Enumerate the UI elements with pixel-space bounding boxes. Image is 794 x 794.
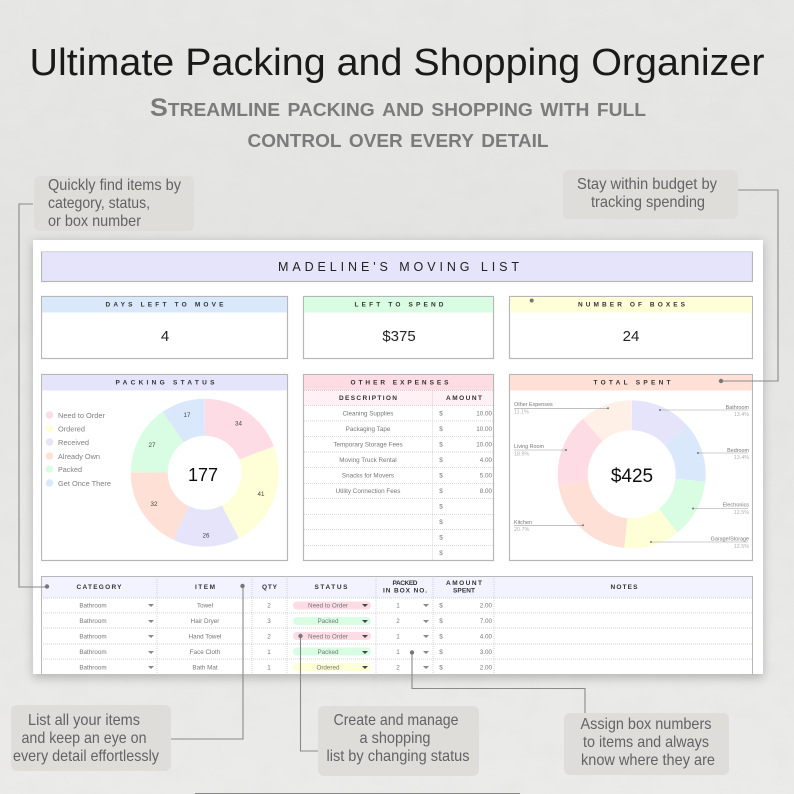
expenses table header: AMOUNT bbox=[446, 395, 482, 402]
stat card: number of boxes bbox=[510, 296, 752, 358]
expenses table rows: 10.00 bbox=[476, 410, 492, 418]
table rows: Hair Dryer bbox=[191, 618, 219, 625]
marker dot on number of boxes bbox=[530, 298, 534, 302]
expenses table rows: Snacks for Movers bbox=[342, 472, 394, 480]
items table header: IN BOX NO. bbox=[383, 588, 427, 594]
arrow: budget callout to total spent bbox=[719, 190, 778, 383]
donut chart: packing status: 17 bbox=[184, 412, 191, 419]
legend: Packed bbox=[58, 465, 82, 474]
table rows: Hand Towel bbox=[189, 634, 221, 640]
panel: other expenses bbox=[304, 374, 494, 560]
expenses table rows: 8.00 bbox=[480, 488, 492, 495]
items table header: STATUS bbox=[314, 584, 348, 591]
expenses table rows: 5.00 bbox=[480, 472, 492, 480]
chart labels: Bathroom bbox=[726, 405, 750, 411]
table rows: 1 bbox=[267, 649, 271, 656]
callout: list all your items: List all your items bbox=[28, 712, 140, 729]
table rows: Need to Order bbox=[308, 602, 348, 610]
items table header: ITEM bbox=[195, 584, 215, 591]
callout: quickly find items: Quickly find items by bbox=[48, 177, 181, 194]
chart labels: Bedroom bbox=[727, 448, 750, 454]
chart labels bbox=[514, 402, 750, 550]
expenses table rows: 10.00 bbox=[476, 442, 492, 448]
chart labels: Garage/Storage bbox=[711, 536, 749, 542]
panel: other expenses: OTHER EXPENSES bbox=[350, 380, 449, 386]
chart labels: 13.4% bbox=[734, 455, 749, 461]
dropdown arrows bbox=[148, 604, 429, 669]
table rows: 2 bbox=[396, 618, 400, 625]
callout: stay within budget bbox=[563, 170, 738, 219]
donut chart: packing status: 27 bbox=[149, 442, 156, 449]
callout: assign box numbers: Assign box numbers bbox=[580, 716, 712, 733]
table rows bbox=[79, 602, 492, 672]
callout: create and manage: list by changing status bbox=[326, 748, 470, 765]
legend: Received bbox=[58, 438, 89, 447]
arrow: items callout to item column bbox=[171, 584, 245, 739]
table rows: 1 bbox=[396, 634, 400, 640]
subtitle: control over every detail bbox=[248, 125, 548, 153]
table rows: 3 bbox=[267, 618, 271, 625]
table rows: Bathroom bbox=[79, 634, 107, 640]
table rows: Face Cloth bbox=[190, 649, 221, 656]
table rows: 3.00 bbox=[480, 649, 492, 656]
expenses table rows: $ bbox=[439, 534, 443, 542]
donut chart: packing status: 41 bbox=[258, 491, 265, 498]
expenses table rows: 10.00 bbox=[476, 426, 492, 433]
table rows: 1 bbox=[396, 649, 400, 656]
items table header: PACKED bbox=[392, 580, 418, 587]
callout: assign box numbers bbox=[564, 713, 729, 775]
items table header: CATEGORY bbox=[76, 584, 122, 591]
expenses table rows bbox=[304, 390, 493, 560]
expenses table rows: $ bbox=[439, 504, 443, 510]
chart labels: 13.4% bbox=[734, 412, 749, 418]
table rows: $ bbox=[439, 664, 443, 672]
table rows: Bathroom bbox=[79, 649, 107, 656]
donut chart: total spent bbox=[573, 415, 691, 533]
dashboard heading: Madeline's Moving List: MADELINE'S MOVING LIST bbox=[278, 260, 519, 274]
table rows: 2.00 bbox=[480, 602, 492, 610]
items table header bbox=[41, 576, 753, 598]
table rows: 2 bbox=[267, 634, 271, 640]
expenses table rows: $ bbox=[439, 519, 443, 526]
callout: quickly find items bbox=[34, 176, 194, 231]
table rows: 2 bbox=[267, 602, 271, 610]
table rows: Need to Order bbox=[308, 634, 348, 640]
legend: Need to Order bbox=[58, 411, 105, 420]
items table header: QTY bbox=[262, 584, 278, 591]
chart labels: 20.7% bbox=[514, 527, 529, 533]
title: Ultimate Packing and Shopping Organizer bbox=[30, 42, 765, 84]
table grid lines bbox=[41, 576, 753, 674]
panel: packing status: PACKING STATUS bbox=[116, 380, 215, 386]
stat card: days left to move: 4 bbox=[161, 328, 169, 345]
legend: Ordered bbox=[58, 424, 85, 434]
table rows: Bathroom bbox=[79, 618, 107, 625]
expenses table rows: Utility Connection Fees bbox=[336, 488, 400, 495]
table rows: 4.00 bbox=[480, 634, 492, 640]
expenses table rows: $ bbox=[439, 442, 443, 448]
table rows: $ bbox=[439, 602, 443, 610]
table rows: 2 bbox=[396, 664, 400, 672]
bottom edge line bbox=[195, 793, 520, 794]
callout: create and manage: a shopping bbox=[360, 730, 430, 747]
table rows: Packed bbox=[317, 618, 339, 625]
table rows: Bath Mat bbox=[192, 664, 218, 672]
items table header: AMOUNT bbox=[446, 580, 482, 587]
dashboard card bbox=[33, 240, 763, 678]
arrow: box number callout to box column bbox=[410, 650, 585, 713]
callout: assign box numbers: to items and always bbox=[583, 734, 709, 751]
arrow: search callout to category bbox=[19, 204, 49, 589]
table rows: 1 bbox=[396, 602, 400, 610]
arrow: status callout to status column bbox=[298, 634, 318, 751]
table outer border bbox=[41, 576, 753, 674]
items table bbox=[41, 576, 753, 674]
chart labels: Other Expenses bbox=[514, 402, 553, 408]
table rows: Ordered bbox=[316, 664, 340, 672]
table rows: $ bbox=[439, 618, 443, 625]
callout: create and manage bbox=[318, 706, 479, 776]
chart labels: Living Room bbox=[514, 444, 544, 450]
donut chart: packing status: 32 bbox=[151, 501, 158, 508]
table rows: Bathroom bbox=[79, 664, 107, 672]
expenses table rows: $ bbox=[439, 472, 443, 480]
subtitle bbox=[150, 94, 646, 153]
expenses table rows: $ bbox=[439, 488, 443, 495]
table rows: Towel bbox=[197, 602, 213, 610]
legend: Get Once There bbox=[58, 479, 111, 488]
table rows: $ bbox=[439, 634, 443, 640]
callout: list all your items: every detail effortlessly bbox=[13, 748, 159, 765]
chart labels: 12.5% bbox=[734, 510, 749, 516]
table rows: 1 bbox=[267, 664, 271, 672]
expenses table rows: $ bbox=[439, 457, 443, 464]
chart labels: Kitchen bbox=[514, 520, 532, 526]
expenses table rows: Cleaning Supplies bbox=[343, 410, 393, 418]
callout: list all your items bbox=[11, 705, 171, 771]
donut chart: packing status: 177 bbox=[188, 465, 218, 485]
legend bbox=[46, 411, 111, 488]
callout: stay within budget: tracking spending bbox=[591, 194, 705, 211]
chart labels: 12.5% bbox=[734, 544, 749, 550]
items table header: NOTES bbox=[610, 584, 638, 591]
panel: packing status bbox=[42, 374, 288, 560]
table rows: Packed bbox=[317, 649, 339, 656]
donut chart: packing status: 26 bbox=[203, 532, 210, 540]
table rows: 7.00 bbox=[480, 618, 492, 625]
donut chart: packing status bbox=[149, 412, 265, 540]
callout: quickly find items: or box number bbox=[48, 213, 142, 230]
panel: total spent: TOTAL SPENT bbox=[594, 380, 671, 386]
expenses table rows: $ bbox=[439, 410, 443, 418]
table rows: $ bbox=[439, 649, 443, 656]
callout: create and manage: Create and manage bbox=[334, 712, 459, 729]
expenses table rows: $ bbox=[439, 426, 443, 433]
expenses table rows: Temporary Storage Fees bbox=[333, 442, 403, 448]
table rows: 2.00 bbox=[480, 664, 492, 672]
stat card: left to spend: $375 bbox=[382, 328, 416, 345]
donut chart: total spent: $425 bbox=[611, 466, 653, 487]
donut chart: packing status: 34 bbox=[235, 420, 242, 428]
items table header: SPENT bbox=[453, 588, 475, 594]
stat card: days left to move bbox=[42, 296, 288, 358]
expenses table rows: Moving Truck Rental bbox=[339, 457, 397, 464]
dashboard heading: Madeline's Moving List bbox=[42, 252, 752, 282]
callout: list all your items: and keep an eye on bbox=[22, 730, 146, 747]
callout: stay within budget: Stay within budget by bbox=[577, 176, 717, 193]
chart labels: 18.9% bbox=[514, 452, 529, 458]
expenses table rows: $ bbox=[439, 550, 443, 557]
callout: quickly find items: category, status, bbox=[48, 195, 150, 212]
expenses table header: DESCRIPTION bbox=[339, 395, 397, 402]
panel: total spent bbox=[510, 374, 752, 560]
chart labels: Electronics bbox=[723, 502, 749, 508]
status pills bbox=[293, 602, 371, 671]
stat card: number of boxes: 24 bbox=[623, 328, 639, 345]
table rows: Bathroom bbox=[79, 602, 107, 610]
subtitle: Streamline packing and shopping with full bbox=[150, 94, 646, 122]
stat card: left to spend bbox=[304, 296, 494, 358]
stat card: number of boxes: NUMBER OF BOXES bbox=[578, 302, 686, 308]
chart labels: 11.1% bbox=[514, 410, 529, 416]
stat card: left to spend: LEFT TO SPEND bbox=[354, 302, 444, 308]
legend: Already Own bbox=[58, 452, 100, 461]
expenses table header bbox=[304, 390, 493, 406]
stat card: days left to move: DAYS LEFT TO MOVE bbox=[106, 302, 224, 308]
callout: assign box numbers: know where they are bbox=[581, 752, 715, 769]
expenses table rows: Packaging Tape bbox=[346, 426, 391, 433]
expenses table rows: 4.00 bbox=[480, 457, 492, 464]
